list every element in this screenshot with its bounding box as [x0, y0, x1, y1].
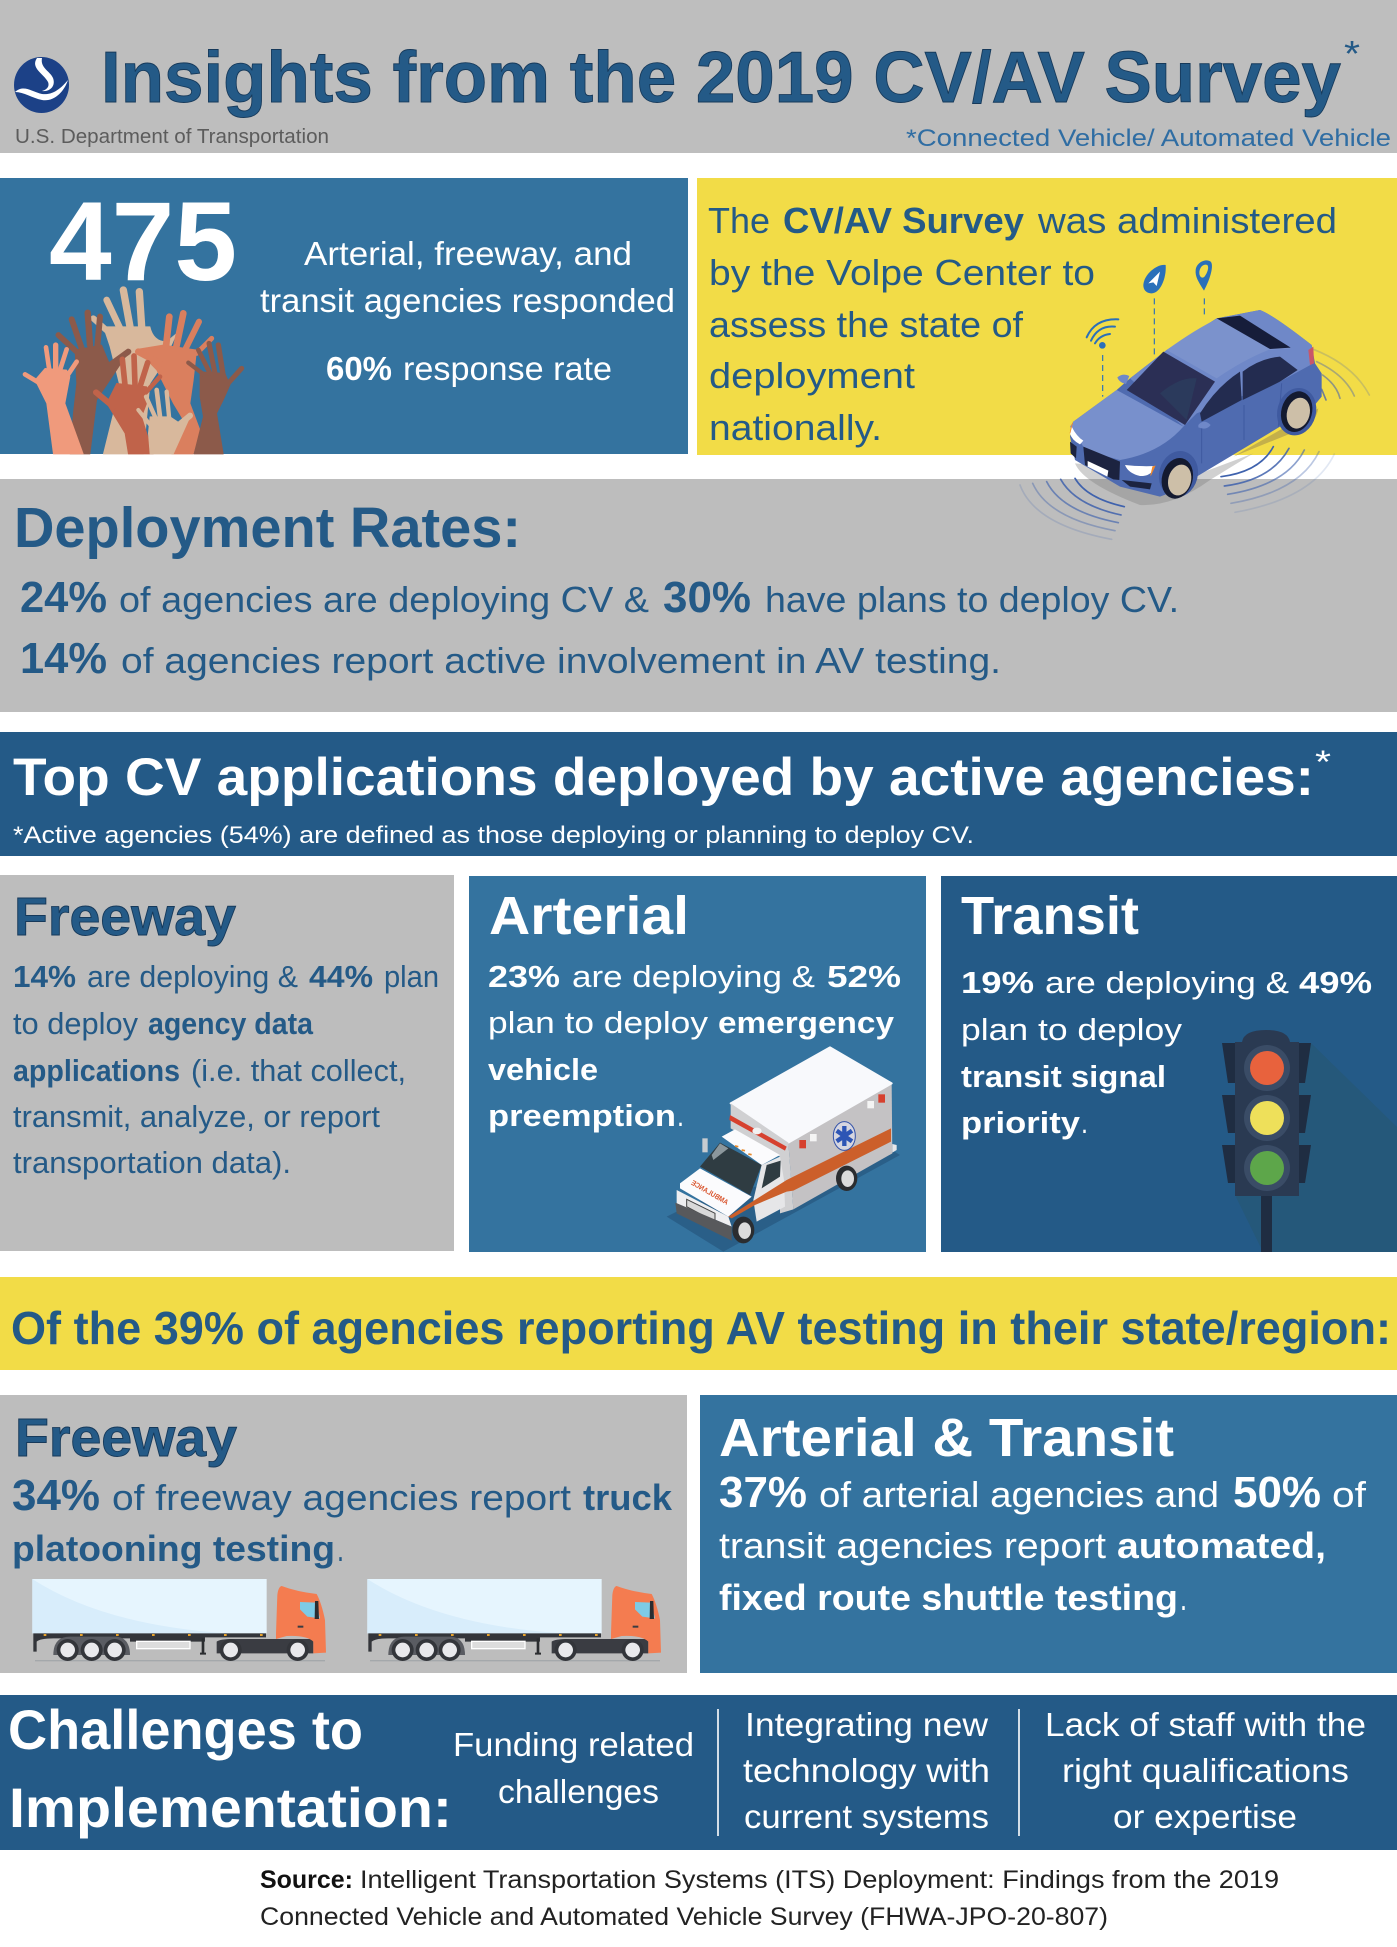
- arterial CV text: are deploying &: [572, 959, 815, 994]
- freeway CV text: transmit, analyze, or report: [13, 1099, 380, 1134]
- freeway AV text: .: [337, 1528, 344, 1569]
- heading: transit: Transit: [961, 886, 1139, 946]
- title footnote: *Connected Vehicle/ Automated Vehicle: [906, 125, 1391, 152]
- transit CV text: 49%: [1299, 965, 1372, 1000]
- transit CV text: plan to deploy: [961, 1012, 1183, 1047]
- arterial CV text: 23%: [488, 959, 560, 994]
- respondents text: response rate: [403, 350, 612, 387]
- panel: arterial and transit AV: [700, 1395, 1397, 1673]
- side mirror: [702, 1138, 708, 1152]
- freeway AV text: [12, 1471, 673, 1569]
- terracotta hand: [137, 313, 212, 454]
- windshield reflection: [1160, 378, 1197, 420]
- heading: deployment rates: Deployment Rates:: [14, 496, 521, 560]
- challenge: funding: Funding related: [453, 1726, 694, 1763]
- windshield glare: [712, 1143, 728, 1160]
- axle fender: [53, 1637, 130, 1655]
- center light: [752, 1128, 762, 1134]
- door window: [762, 1161, 781, 1188]
- banner: top CV applications: [0, 732, 1397, 856]
- mirrors: [1117, 375, 1211, 429]
- challenge: integration: Integrating new: [745, 1706, 988, 1743]
- windshield: [700, 1143, 762, 1195]
- illustration: truck 2: [367, 1579, 661, 1661]
- survey description text: by the Volpe Center to: [709, 252, 1095, 293]
- challenge: staffing: or expertise: [1113, 1798, 1297, 1835]
- arterial and transit AV text: 50%: [1233, 1468, 1321, 1517]
- trailer: [32, 1579, 267, 1633]
- challenge: integration: [743, 1706, 990, 1835]
- green lamp: [1250, 1151, 1284, 1185]
- mirrored ambulance lettering: AMBULANCE: [690, 1178, 730, 1207]
- arterial and transit AV text: fixed route shuttle testing: [719, 1577, 1178, 1618]
- connection lines: [1103, 298, 1204, 397]
- lower intakes: [1070, 442, 1152, 489]
- banner asterisk: *: [1315, 744, 1331, 780]
- sensor waves: front right: [1221, 447, 1334, 512]
- arterial and transit AV text: of: [1332, 1474, 1367, 1515]
- challenge: funding: [453, 1726, 694, 1810]
- respondents text: transit agencies responded: [260, 282, 675, 319]
- rear wheel: [1272, 383, 1322, 440]
- challenge: integration: current systems: [744, 1798, 989, 1835]
- wheels: [57, 1639, 309, 1661]
- car body: [1070, 310, 1322, 497]
- grille slats: [687, 1199, 715, 1222]
- freeway CV text: are deploying &: [87, 959, 298, 994]
- panel: 475 respondents: [0, 178, 688, 454]
- heading: challenges: Implementation:: [9, 1776, 452, 1839]
- icon: DOT logo: [14, 57, 69, 113]
- warning lights: [729, 1115, 787, 1151]
- cab window: [300, 1602, 320, 1618]
- challenge: staffing: right qualifications: [1062, 1752, 1349, 1789]
- cab roof: [722, 1129, 780, 1165]
- clearance lights: [44, 1634, 263, 1636]
- freeway CV text: [13, 959, 439, 1180]
- housing: [1235, 1030, 1299, 1196]
- door lines: [1202, 383, 1282, 463]
- source citation: [260, 1866, 1279, 1931]
- front grille: [677, 1190, 732, 1227]
- freeway CV text: to deploy: [13, 1006, 138, 1041]
- CV deployment statistic: 24%: [20, 573, 107, 622]
- icon: navigation pin: [1143, 265, 1166, 293]
- survey description text: was administered: [1037, 200, 1337, 241]
- arterial and transit AV text: [719, 1468, 1367, 1618]
- arterial and transit AV text: transit agencies report: [719, 1525, 1106, 1566]
- upper body: [1130, 310, 1313, 427]
- arterial CV text: 52%: [827, 959, 901, 994]
- traffic light long shadow: [1236, 1043, 1397, 1252]
- arterial CV text: [488, 959, 901, 1133]
- navigation arrow: [1148, 272, 1160, 286]
- visors: [1222, 1043, 1311, 1183]
- trailer shading: [32, 1579, 227, 1633]
- survey description text: assess the state of: [709, 304, 1024, 345]
- sensor waves: rear: [1313, 349, 1369, 400]
- hood: [1070, 390, 1183, 460]
- illustration: truck 1: [32, 1579, 326, 1661]
- challenge: integration: technology with: [743, 1752, 990, 1789]
- challenge: staffing: [1045, 1706, 1366, 1835]
- AV testing statistic: of agencies report active involvement in AV testing.: [121, 640, 1001, 681]
- tractor chassis: [217, 1639, 313, 1655]
- survey description text: CV/AV Survey: [783, 200, 1024, 241]
- arterial CV text: emergency: [718, 1005, 895, 1040]
- illustration: ambulance: [667, 1047, 900, 1252]
- transit CV text: are deploying &: [1045, 965, 1289, 1000]
- side markers: [799, 1094, 885, 1148]
- panel: freeway AV: [0, 1395, 687, 1673]
- panel: arterial CV: [469, 876, 926, 1252]
- wing mirror: [315, 1601, 319, 1619]
- sunroof: [1217, 316, 1291, 349]
- turn signals: [1070, 423, 1155, 476]
- beige hand: [93, 290, 177, 454]
- sensor waves: front left: [1020, 478, 1124, 539]
- cab door: [753, 1157, 785, 1222]
- salmon hand: [25, 345, 83, 454]
- freeway CV text: 44%: [309, 959, 373, 994]
- arterial and transit AV text: 37%: [719, 1468, 807, 1517]
- arterial and transit AV text: .: [1180, 1577, 1187, 1618]
- panel: transit CV: [941, 876, 1397, 1252]
- yellow lamp: [1250, 1101, 1284, 1135]
- trailer chassis: [33, 1633, 266, 1652]
- freeway CV text: 14%: [13, 959, 76, 994]
- icon: location pin: [1196, 260, 1212, 291]
- banner footnote: *Active agencies (54%) are defined as those deploying or planning to deploy CV.: [13, 822, 974, 849]
- roof markers: [735, 1146, 752, 1155]
- challenge: staffing: Lack of staff with the: [1045, 1706, 1366, 1743]
- hood: [680, 1168, 752, 1217]
- respondent count: 475: [49, 179, 237, 304]
- CV deployment statistic: [20, 573, 1179, 622]
- freeway CV text: (i.e. that collect,: [191, 1053, 406, 1088]
- title: Insights from the 2019 CV/AV Survey: [101, 38, 1341, 118]
- transit CV text: 19%: [961, 965, 1034, 1000]
- respondents text: 60%: [326, 350, 392, 387]
- source citation: Intelligent Transportation Systems (ITS) Deployment: Findings from the 2019: [360, 1866, 1279, 1894]
- freeway CV text: applications: [13, 1053, 180, 1088]
- arterial and transit AV text: of arterial agencies and: [819, 1474, 1219, 1515]
- freeway AV text: platooning testing: [12, 1528, 335, 1569]
- heading: challenges: [8, 1698, 452, 1839]
- bumper: [675, 1203, 732, 1241]
- heading: freeway: Freeway: [15, 1408, 237, 1468]
- landing gear: [200, 1638, 206, 1655]
- arterial and transit AV text: automated,: [1117, 1525, 1326, 1566]
- hubs: [60, 1643, 305, 1657]
- lens rings: [1244, 1045, 1290, 1191]
- transit CV text: .: [1081, 1105, 1088, 1140]
- panel: freeway CV: [0, 875, 454, 1251]
- box front: [731, 1103, 793, 1213]
- survey description text: The: [708, 200, 770, 241]
- transit CV text: transit signal: [961, 1059, 1166, 1094]
- front wheel: [732, 1217, 754, 1243]
- number plate: [1088, 461, 1108, 477]
- freeway AV text: 34%: [12, 1471, 100, 1520]
- CV deployment statistic: have plans to deploy CV.: [765, 579, 1179, 620]
- transit CV text: priority: [961, 1105, 1081, 1140]
- roof: [1167, 318, 1290, 378]
- side windows: [1200, 357, 1298, 422]
- AV testing heading: Of the 39% of agencies reporting AV testing in their state/region:: [11, 1302, 1391, 1354]
- rear wheel: [836, 1166, 857, 1191]
- box top: [731, 1047, 892, 1143]
- transit CV text: [961, 965, 1372, 1140]
- rear step: [892, 1144, 897, 1153]
- CV deployment statistic: 30%: [663, 573, 751, 622]
- survey description text: [708, 200, 1337, 448]
- survey description text: nationally.: [709, 407, 882, 448]
- panel: deployment rates: [0, 479, 1397, 712]
- heading: arterial: Arterial: [489, 886, 689, 946]
- freeway CV text: transportation data).: [13, 1145, 291, 1180]
- heading: arterial and transit: Arterial & Transit: [719, 1408, 1174, 1468]
- challenge: funding: challenges: [498, 1773, 659, 1810]
- banner: AV testing: [0, 1277, 1397, 1370]
- arterial CV text: vehicle: [488, 1052, 598, 1087]
- AV testing statistic: 14%: [20, 634, 107, 683]
- panel: challenges: [0, 1695, 1397, 1850]
- headlights: [1070, 427, 1155, 476]
- pole: [1261, 1196, 1272, 1252]
- heading: freeway: Freeway: [14, 887, 236, 947]
- icon: wireless signal: [1087, 319, 1118, 348]
- red lamp: [1250, 1051, 1284, 1085]
- red-brown hand: [96, 356, 160, 454]
- freeway CV text: plan: [384, 959, 439, 994]
- respondents text: Arterial, freeway, and: [304, 235, 632, 272]
- ambulance shadow: [667, 1150, 900, 1252]
- door handle: [298, 1626, 303, 1628]
- CV deployment statistic: of agencies are deploying CV &: [119, 579, 649, 620]
- windshield: [1127, 352, 1215, 425]
- freeway AV text: truck: [583, 1477, 673, 1518]
- icon: raised hands: [25, 290, 242, 454]
- dark brown hand: [58, 313, 130, 454]
- heading: challenges: Challenges to: [8, 1698, 363, 1761]
- box side: [788, 1083, 892, 1209]
- car shadows: [1075, 408, 1318, 505]
- side box: [137, 1641, 190, 1649]
- respondents text: [260, 235, 675, 387]
- ground line: [35, 1659, 325, 1663]
- AV testing statistic: [20, 634, 1001, 683]
- panel: survey description: [697, 178, 1397, 455]
- star glyph: [837, 1126, 852, 1146]
- arterial CV text: preemption: [488, 1098, 676, 1133]
- icon: traffic light: [1222, 1030, 1311, 1252]
- small beige hand: [138, 390, 192, 454]
- tail light: [1308, 347, 1314, 365]
- orange stripe: [728, 1128, 891, 1218]
- header band: [0, 0, 1397, 153]
- cab: [276, 1586, 326, 1653]
- title asterisk: *: [1344, 33, 1360, 74]
- arterial CV text: plan to deploy: [488, 1005, 709, 1040]
- star of life: [833, 1122, 855, 1150]
- grille: [1083, 447, 1120, 480]
- freeway AV text: of freeway agencies report: [112, 1477, 571, 1518]
- banner heading: Top CV applications deployed by active agencies:: [13, 748, 1314, 807]
- illustration: connected car: [1020, 260, 1369, 539]
- U.S. DOT wordmark: U.S. Department of Transportation: [15, 126, 329, 148]
- source citation: Source:: [260, 1866, 353, 1894]
- freeway CV text: agency data: [148, 1006, 314, 1041]
- front wheel: [1153, 447, 1203, 503]
- arterial CV text: .: [677, 1098, 684, 1133]
- dark brown right hand: [188, 343, 242, 454]
- survey description text: deployment: [709, 355, 915, 396]
- source citation: Connected Vehicle and Automated Vehicle Survey (FHWA-JPO-20-807): [260, 1903, 1108, 1931]
